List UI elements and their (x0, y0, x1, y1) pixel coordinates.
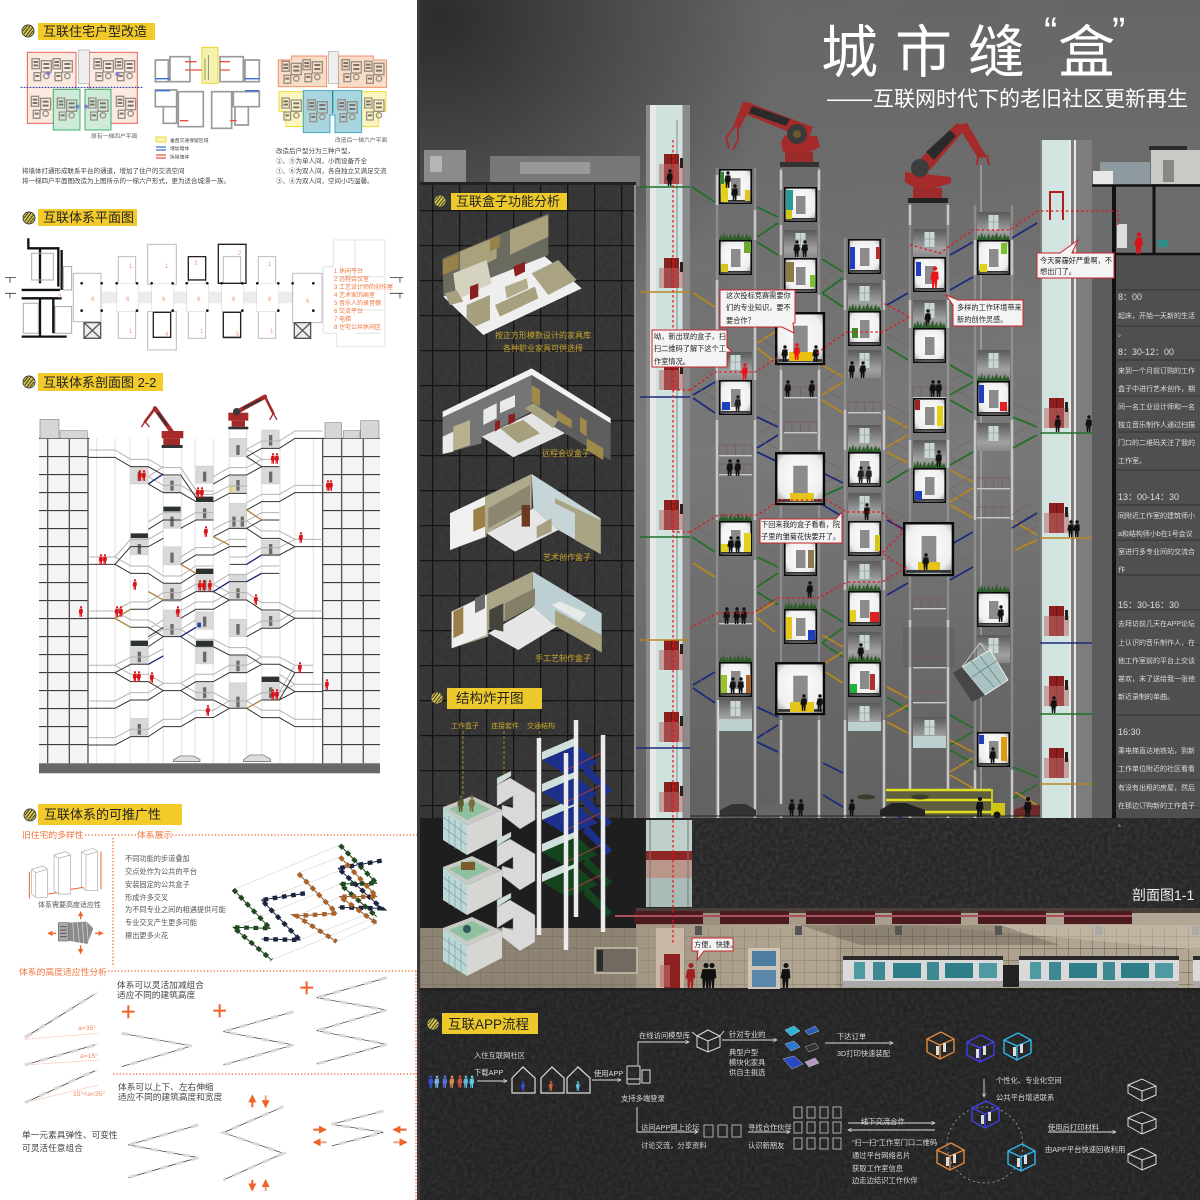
text block: unit types (276, 146, 387, 185)
plan: renovated six-unit floor (278, 52, 387, 133)
text block: day timeline: 同附近工作室的建筑师小 (1118, 511, 1195, 520)
plan room numbers (58, 251, 310, 338)
callout: convenient (692, 938, 737, 960)
section 2-2 drawing (39, 397, 380, 773)
text block: element elasticity (22, 1129, 118, 1153)
elevator tower right (1040, 140, 1092, 820)
plan room numbers: 6 (91, 297, 95, 303)
text block: renovation note (22, 166, 230, 185)
callout: inspiration: 新的创作灵感。 (957, 315, 1007, 324)
iso room: art studio box (450, 474, 601, 554)
callout: convenient: 方便，快捷。 (694, 940, 737, 949)
text block: day timeline: 去拜访前几天在APP论坛 (1118, 619, 1195, 628)
icon: recycled cubes (1128, 1079, 1156, 1170)
heading: box function analysis: 互联盒子功能分析 (456, 194, 560, 209)
heading: section 2-2: 互联体系剖面图 2-2 (43, 375, 156, 390)
orange section labels: 旧住宅的多样性 (22, 829, 84, 840)
text block: day timeline: 盒子中进行艺术创作，期 (1118, 384, 1195, 393)
APP flow labels: 下达订单 (837, 1032, 866, 1041)
heading: box function analysis (434, 193, 567, 210)
plan label: original: 原有一梯四户平面 (91, 132, 138, 140)
APP flow labels: 在线访问模型库 (639, 1031, 690, 1040)
title: 盒 (1058, 21, 1115, 85)
APP flow labels: 典型户型 (729, 1048, 758, 1057)
APP flow labels: 入住互联网社区 (474, 1051, 525, 1060)
text block: system display: 不同功能的步道叠加 (125, 854, 190, 863)
caption: craft box: 手工艺制作盒子 (535, 653, 591, 663)
exploded: transport structure (539, 720, 612, 950)
caption: furniture library: 各种职业家具可供选择 (503, 343, 583, 353)
text block: unit types: ②、⑤为单人间，小而设备齐全 (276, 156, 368, 165)
icon: houses (512, 1067, 590, 1093)
callout: daisy (760, 512, 842, 543)
heading: unit renovation (22, 23, 155, 40)
thin column rails (717, 168, 1012, 818)
text block: day timeline: 工作单位附近的社区看看 (1118, 764, 1195, 773)
text block: day timeline: 乘电梯直达地铁站，到新 (1118, 746, 1195, 755)
diagram: layered network (233, 845, 382, 960)
plan room numbers: 3 (194, 261, 198, 267)
caption: furniture library: 按正方形模数设计的家具库 (495, 330, 591, 340)
callout: inspiration (946, 295, 1023, 326)
stairs between columns (692, 174, 1037, 845)
callout: new box: 作室情况。 (654, 357, 690, 366)
APP flow labels: 供自主挑选 (729, 1068, 766, 1077)
heading: section 2-2 (23, 373, 163, 391)
plan room numbers: 1 (200, 329, 204, 335)
street scene: bus, cars and pedestrians (690, 789, 1040, 818)
platform doors and wall vent (595, 948, 780, 989)
callout: bid cooperation: 这次投标竞赛需要你 (726, 291, 791, 300)
text block: day timeline: 独立音乐制作人通过扫描 (1118, 420, 1195, 429)
plan room numbers: 1 (129, 329, 133, 335)
plan: original four-unit floor (21, 50, 143, 130)
text block: day timeline: a和结构师小b在1号会议 (1118, 529, 1193, 538)
exploded labels (451, 721, 555, 730)
panel: section 1-1 poster background (420, 0, 1200, 820)
APP flow labels: 支持多端登录 (621, 1094, 665, 1103)
panel: subway platform (420, 908, 1200, 991)
plan room numbers: 6 (268, 297, 272, 303)
text block: day timeline: 8：30-12：00 (1118, 347, 1174, 357)
title: 缝 (968, 21, 1025, 85)
text block: system display: 为不同专业之间的相遇提供可能 (125, 905, 226, 914)
iso room: remote meeting box (443, 368, 611, 461)
platform passengers (685, 963, 790, 988)
APP flow arrows (477, 1040, 1116, 1183)
heading: extensibility: 互联体系的可推广性 (44, 807, 161, 822)
system plan legend: 2 远程会议室 (334, 275, 369, 283)
text block: day timeline: 。 (1118, 331, 1125, 338)
text block: unit types: ①、⑥为双人间，各自独立又满足交流 (276, 166, 387, 175)
elevator shaft underground (646, 820, 692, 907)
subway station signs (695, 926, 1199, 935)
plan room numbers: 6 (126, 297, 130, 303)
text block: scalable: 适应不同的建筑高度和宽度 (118, 1091, 223, 1102)
white column bars (717, 170, 1012, 818)
panel: right building facade (1092, 146, 1200, 818)
panel: APP flow background (420, 991, 1200, 1200)
panel: underground soil band (420, 818, 1200, 928)
text block: day timeline: 新近录制的单曲。 (1118, 692, 1174, 701)
text block: day timeline: 8：00 (1118, 292, 1142, 302)
callout: bid cooperation (720, 290, 795, 333)
callout: smog: 今天雾霾好严重啊，不 (1040, 256, 1112, 265)
subtitle: 互联网时代下的老旧社区更新再生 (873, 88, 1188, 111)
plan room numbers: 1 (270, 329, 274, 335)
text block: system display: 擦出更多火花 (125, 931, 168, 940)
APP flow labels: 3D打印快速装配 (837, 1049, 891, 1058)
text block: element elasticity: 单一元素具弹性、可变性 (22, 1129, 118, 1140)
icon: devices (627, 1066, 650, 1084)
callout: new box: 呦，新出现的盒子，扫 (654, 332, 726, 341)
APP flow labels (474, 1030, 1125, 1185)
work boxes: column E (977, 212, 1010, 766)
caption: furniture library (495, 330, 591, 353)
callout: new box (652, 330, 732, 367)
plan room numbers: 4 (165, 332, 169, 338)
system plan drawing (5, 238, 403, 350)
icon: furniture modules (783, 1026, 819, 1069)
text block: system display (125, 854, 226, 940)
APP flow labels: 针对专业的 (729, 1030, 765, 1039)
text block: day timeline (1118, 292, 1195, 828)
plan room numbers: 6 (197, 297, 201, 303)
callout: smog: 想出门了。 (1040, 267, 1076, 276)
caption: height adaptability: 体系需要高度适应性 (38, 900, 101, 909)
text block: renovation note: 将墙体打通形成联系平台的通道，增加了住户的交流空间 (22, 166, 184, 175)
legend: wall changes (156, 137, 209, 160)
work boxes: column B (776, 188, 824, 714)
system plan legend: 5 音乐人的录音棚 (334, 299, 381, 307)
icon: people row (428, 1075, 474, 1088)
callout: daisy: 子里的雏菊花快要开了。 (761, 532, 840, 541)
text block: day timeline: 工作室。 (1118, 456, 1146, 465)
plan room numbers: 6 (306, 299, 310, 305)
text block: day timeline: 15：30-16：30 (1118, 600, 1179, 610)
section 2-2 robot 2 (228, 397, 277, 429)
icons: plus signs and stretch arrows (122, 981, 407, 1191)
diagram: stepped chains and height analysis (25, 978, 387, 1180)
callout: inspiration: 多样的工作环境带来 (957, 303, 1022, 312)
APP flow labels: 讨论交流，分享资料 (641, 1141, 707, 1150)
text block: day timeline: 有没有出租的房屋，然后 (1118, 783, 1195, 792)
heading: exploded structure (431, 688, 542, 709)
callout: smog (1037, 240, 1114, 278)
plan room numbers: 1 (129, 264, 133, 270)
title (821, 10, 1125, 85)
panel divider (417, 0, 420, 1200)
orange section labels: 体系展示 (137, 829, 172, 840)
plan: wall changes (155, 47, 259, 128)
legend: wall changes: 增加墙体 (170, 145, 189, 152)
plan room numbers: 5 (236, 332, 240, 338)
text block: scalable: 体系可以上下、左右伸缩 (118, 1081, 214, 1092)
plan room numbers: 6 (162, 297, 166, 303)
text block: day timeline: 16:30 (1118, 727, 1141, 737)
system plan legend: 7 电梯 (334, 315, 351, 323)
text block: element elasticity: 可灵活任意组合 (22, 1142, 83, 1153)
text block: system display: 形成许多交叉 (125, 893, 168, 902)
icon: accordion with arrows (48, 912, 103, 953)
angle labels: a=35° (78, 1024, 96, 1032)
APP flow labels: 使用后打印材料 (1048, 1123, 1100, 1132)
text block: scalable (118, 1081, 223, 1102)
text block: day timeline: 上认识的音乐制作人，在 (1118, 638, 1195, 647)
system plan legend: 1 休闲平台 (334, 267, 363, 275)
title: ” (1112, 10, 1125, 54)
system plan legend: 8 住宅公共休闲区 (334, 323, 381, 331)
text block: day timeline: 起床，开始一天新的生活 (1118, 311, 1195, 320)
APP flow labels: 获取工作室信息 (852, 1164, 903, 1173)
text block: system display: 安装固定的公共盒子 (125, 880, 190, 889)
plan label: renovated: 改造后一梯六户平面 (335, 136, 387, 144)
APP flow labels: 认识新朋友 (748, 1141, 784, 1150)
plan room numbers: 1 (268, 262, 272, 268)
exploded labels: 工作盒子 (451, 721, 479, 730)
roof-top buildings left (420, 150, 640, 186)
text block: day timeline: 。 (1118, 821, 1125, 828)
system plan legend: 4 艺术家的画室 (334, 291, 375, 299)
iso room: furniture library (443, 213, 582, 335)
section 2-2 red figures (79, 453, 333, 716)
heading: extensibility (24, 804, 182, 825)
angle labels (73, 1024, 106, 1098)
text block: day timeline: 来到一个月前订购的工作 (1118, 366, 1195, 375)
work boxes: column A (719, 170, 752, 731)
system plan legend (334, 267, 393, 331)
section 2-2 robot 1 (142, 408, 183, 448)
title: 城 (821, 21, 878, 85)
exploded labels: 交通结构 (527, 721, 555, 730)
text block: day timeline: 门口的二维码关注了我的 (1118, 438, 1195, 447)
heading: APP flow (427, 1013, 538, 1034)
text block: renovation note: 将一梯四户平面图改造为上图所示的一梯六户形式，更为适合城漂一族。 (22, 176, 230, 185)
text block: flexible combination (117, 979, 204, 1000)
work boxes: column D (903, 229, 954, 748)
APP flow labels: 模块化家具 (729, 1058, 766, 1067)
plan room numbers: 8 (58, 294, 62, 300)
diagram: building height bars (29, 848, 101, 898)
text block: system display: 专业交叉产生更多可能 (125, 918, 197, 927)
plan room numbers: 2 (238, 251, 242, 257)
callout: bid cooperation: 们的专业知识，要不 (726, 303, 791, 312)
APP flow labels: 访问APP网上论坛 (641, 1123, 699, 1132)
caption: remote meeting box: 远程会议盒子 (542, 448, 590, 458)
platform elevator (656, 928, 684, 988)
orange section labels (19, 829, 172, 977)
APP flow labels: 由APP平台快速回收利用 (1045, 1145, 1125, 1154)
system plan legend: 6 交流平台 (334, 307, 363, 315)
falling glass module (953, 643, 1008, 702)
subway trains (843, 956, 1200, 987)
system plan legend: 3 工艺设计师的创作屋 (334, 283, 393, 291)
legend: wall changes: 垂直交通保留区域 (170, 137, 209, 144)
subtitle: —— (827, 86, 872, 111)
orange section labels: 体系的高度适应性分析 (19, 966, 107, 977)
exploded labels: 连接套件 (491, 721, 519, 730)
icon: model carton (692, 1030, 724, 1052)
caption: art studio box: 艺术创作盒子 (543, 552, 591, 562)
text block: flexible combination: 适应不同的建筑高度 (117, 989, 196, 1000)
exploded: connectors (497, 771, 535, 951)
APP flow labels: 个性化、专业化空间 (996, 1076, 1062, 1085)
APP flow labels: 通过平台网络名片 (852, 1151, 910, 1160)
plan room numbers: 6 (232, 297, 236, 303)
text block: unit types: ③、④为双人间，空间小巧温馨。 (276, 176, 374, 185)
APP flow labels: 边走边结识工作伙伴 (852, 1176, 918, 1185)
APP flow labels: 使用APP (594, 1069, 623, 1078)
APP flow labels: 下载APP (474, 1068, 503, 1077)
icon: partner cards (704, 1107, 841, 1149)
robot arm 1 (726, 102, 820, 167)
callout: new box: 扫二维码了解下这个工 (654, 344, 726, 353)
callout: bid cooperation: 要合作？ (726, 316, 755, 325)
text block: system display: 交点处作为公共的平台 (125, 867, 197, 876)
APP flow labels: 公共平台增进联系 (996, 1093, 1054, 1102)
crane cable (980, 165, 982, 815)
elevator tower left (636, 105, 690, 820)
work boxes: column C (848, 240, 881, 731)
legend: wall changes: 拆除墙体 (170, 154, 189, 160)
robot arm 2 (905, 123, 989, 203)
exploded: work boxes (443, 795, 502, 976)
icon: printed cubes (927, 1032, 1035, 1171)
heading: system plan: 互联体系平面图 (43, 210, 134, 225)
callout: daisy: 下回来我的盒子看看，院 (761, 520, 840, 529)
angle labels: 15°<a<35° (73, 1090, 106, 1098)
text block: day timeline: 甚欢，末了送给我一张他 (1118, 674, 1195, 683)
text block: flexible combination: 体系可以灵活加减组合 (117, 979, 204, 990)
title: “ (1044, 10, 1057, 54)
plan room numbers: 1 (165, 264, 169, 270)
text block: day timeline: 13：00-14：30 (1118, 492, 1179, 502)
text block: unit types: 改造后户型分为三种户型， (276, 146, 354, 155)
text block: day timeline: 在那边订购新的工作盒子 (1118, 801, 1195, 810)
text block: day timeline: 他工作室前的平台上交谈 (1118, 656, 1195, 665)
heading: APP flow: 互联APP流程 (448, 1017, 529, 1032)
heading: exploded structure: 结构炸开图 (456, 691, 524, 706)
angle labels: a=15° (80, 1052, 98, 1060)
ceiling red beams (615, 911, 1132, 924)
red dotted route (673, 140, 1118, 945)
text block: day timeline: 作 (1118, 565, 1125, 574)
text block: day timeline: 间一名工业设计师和一名 (1118, 402, 1195, 411)
text block: day timeline: 室进行多专业间的交流合 (1118, 547, 1195, 556)
title: 市 (895, 21, 952, 85)
APP flow labels: 线下交流合作 (861, 1117, 905, 1126)
APP flow labels: 寻找合作伙伴 (748, 1123, 792, 1132)
heading: unit renovation: 互联住宅户型改造 (43, 24, 147, 39)
iso room: craft box (452, 572, 602, 653)
panel: left building facade (420, 185, 636, 825)
APP flow labels: “扫一扫”工作室门口二维码 (852, 1138, 937, 1147)
left white panel (0, 0, 418, 1200)
section label: 剖面图1-1 (1132, 887, 1194, 903)
